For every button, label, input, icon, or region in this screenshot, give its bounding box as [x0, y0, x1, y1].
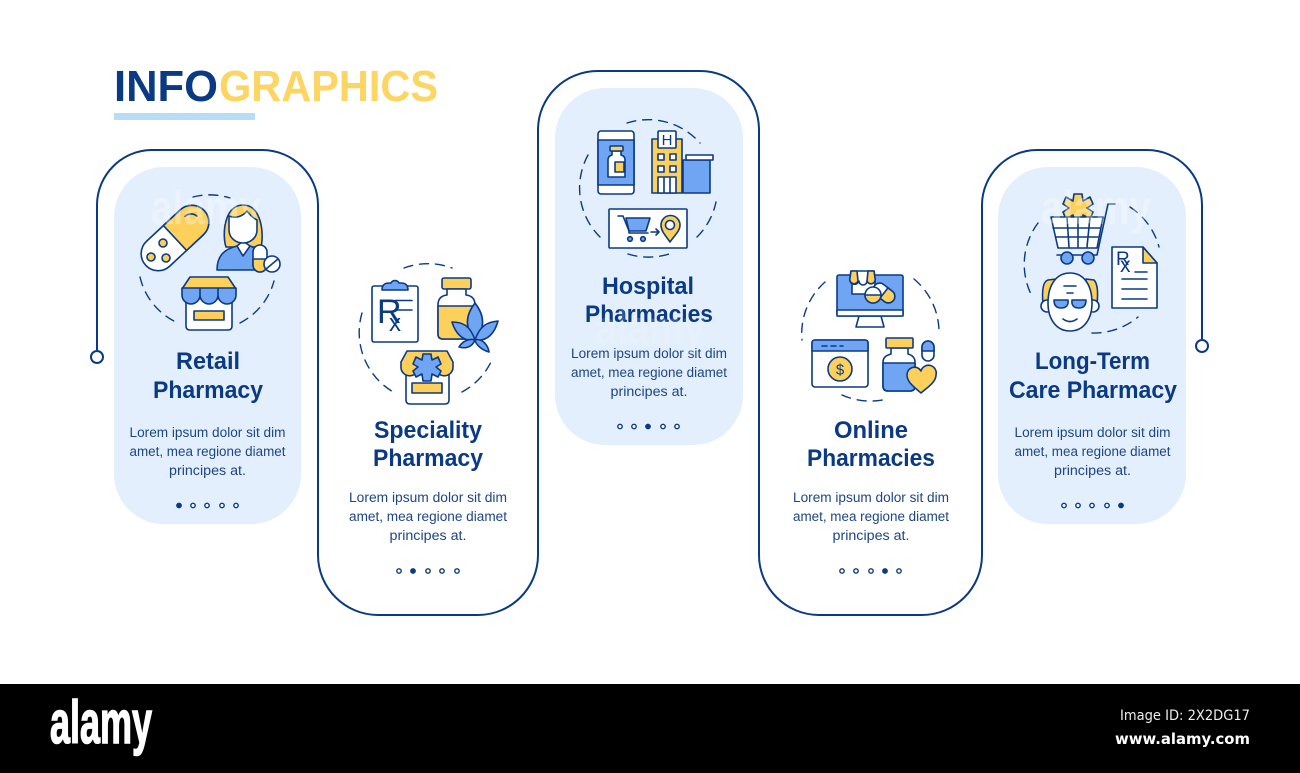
text block: Lorem ipsum dolor sit dim	[349, 490, 507, 505]
panel: long-term care pharmacy	[998, 167, 1186, 524]
text block: amet, mea regione diamet	[571, 365, 727, 380]
panel: online pharmacies	[793, 271, 949, 573]
heading: Pharmacy	[373, 445, 484, 472]
heading: Retail	[176, 348, 240, 375]
pagination dots	[177, 503, 238, 508]
text block: principes at.	[832, 528, 910, 543]
watermarks: alamy	[595, 302, 705, 355]
text block	[130, 425, 286, 478]
pagination dots	[840, 569, 901, 573]
text block: amet, mea regione diamet	[793, 509, 949, 524]
icon: cart, prescription and elderly man: x	[1120, 254, 1131, 277]
heading	[585, 273, 713, 328]
text block: amet, mea regione diamet	[349, 509, 507, 524]
text block: Lorem ipsum dolor sit dim	[130, 425, 286, 440]
title: INFO	[114, 62, 218, 111]
text block	[793, 490, 949, 543]
heading	[153, 348, 264, 404]
text block: amet, mea regione diamet	[1014, 444, 1171, 459]
heading: Online	[834, 417, 908, 444]
text block: principes at.	[610, 384, 688, 399]
footer band	[0, 684, 1300, 773]
connecting outline	[91, 71, 1208, 615]
pagination dots	[397, 569, 459, 573]
alamy logo: alamy	[50, 689, 152, 756]
watermarks: alamy	[1041, 182, 1151, 235]
text block: amet, mea regione diamet	[130, 444, 286, 459]
icon: cart, prescription and elderly man	[1024, 194, 1159, 333]
heading	[1009, 348, 1178, 404]
heading	[373, 417, 484, 472]
watermarks	[151, 182, 1151, 355]
heading: Hospital	[602, 273, 694, 300]
text block: principes at.	[390, 528, 466, 543]
icon: pill, pharmacist and store	[134, 195, 280, 330]
text block: principes at.	[169, 463, 246, 478]
watermarks: alamy	[151, 182, 261, 235]
heading: Long-Term	[1035, 348, 1150, 375]
icon: prescription, bottle, leaf and store: x	[389, 310, 401, 337]
icon: phone, hospital and cart with location: H	[662, 132, 672, 149]
icon: monitor, payment and bottle with heart	[802, 271, 939, 401]
pagination dots	[618, 424, 679, 429]
text block	[349, 490, 507, 543]
title	[114, 62, 438, 120]
text block: principes at.	[1054, 463, 1131, 478]
website: www.alamy.com	[1115, 730, 1250, 748]
pagination dots	[1062, 503, 1123, 508]
heading: Speciality	[374, 417, 483, 444]
text block	[571, 346, 727, 399]
image id: Image ID: 2X2DG17	[1120, 708, 1250, 724]
text block: Lorem ipsum dolor sit dim	[571, 346, 727, 361]
panel: hospital pharmacies	[555, 88, 743, 445]
heading	[807, 417, 935, 472]
icon: cart, prescription and elderly man: R	[1116, 249, 1130, 270]
heading: Pharmacy	[153, 377, 264, 404]
icon: monitor, payment and bottle with heart: $	[836, 362, 845, 378]
icon: phone, hospital and cart with location	[580, 120, 716, 257]
panel: speciality pharmacy	[349, 264, 507, 573]
text block: Lorem ipsum dolor sit dim	[1014, 425, 1170, 440]
heading: Pharmacies	[585, 301, 713, 328]
title: GRAPHICS	[219, 62, 438, 111]
text block: Lorem ipsum dolor sit dim	[793, 490, 949, 505]
icon: prescription, bottle, leaf and store	[359, 264, 498, 404]
heading: Care Pharmacy	[1009, 377, 1178, 404]
icon: prescription, bottle, leaf and store: R	[377, 293, 402, 331]
heading: Pharmacies	[807, 445, 935, 472]
panel: retail pharmacy	[114, 167, 301, 524]
text block	[1014, 425, 1171, 478]
